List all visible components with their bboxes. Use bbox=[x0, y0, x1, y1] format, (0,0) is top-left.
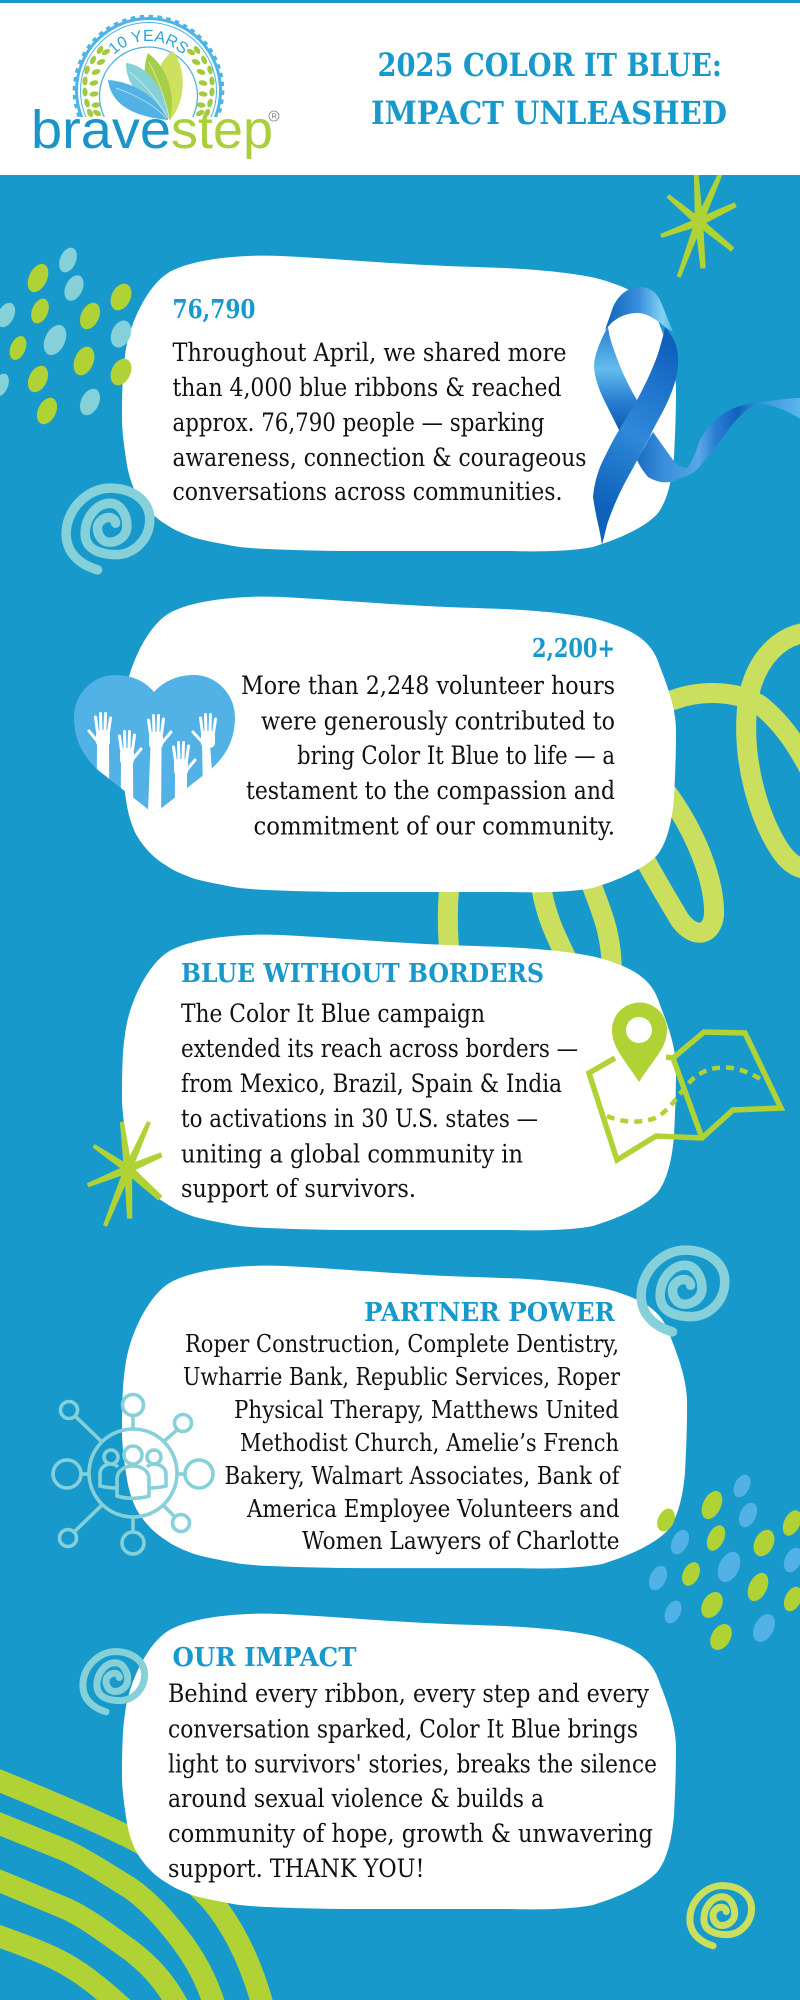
text block: America Employee Volunteers and bbox=[246, 1495, 619, 1523]
text block: commitment of our community. bbox=[254, 812, 615, 840]
registered mark bbox=[269, 111, 279, 121]
decoration: green star top right bbox=[660, 167, 737, 278]
header band bbox=[0, 0, 800, 175]
registered mark: R bbox=[271, 112, 277, 121]
decoration: dots top left bbox=[0, 245, 136, 427]
heading: 2,200+: 2,200+ bbox=[532, 634, 615, 664]
text block: than 4,000 blue ribbons & reached bbox=[172, 373, 562, 402]
decoration: green star left bbox=[87, 1121, 163, 1227]
text block bbox=[181, 999, 578, 1203]
laurel right bbox=[186, 45, 215, 118]
panel: blue without borders bbox=[122, 935, 676, 1230]
icon: blue ribbon bbox=[593, 287, 800, 545]
text block: light to survivors' stories, breaks the silence bbox=[168, 1750, 657, 1778]
title: IMPACT UNLEASHED bbox=[371, 94, 727, 132]
title bbox=[371, 46, 727, 132]
text block: Bakery, Walmart Associates, Bank of bbox=[224, 1462, 621, 1490]
icon: heart with raised hands bbox=[74, 675, 235, 814]
text block: Uwharrie Bank, Republic Services, Roper bbox=[183, 1363, 620, 1391]
text block bbox=[241, 671, 615, 840]
text block: More than 2,248 volunteer hours bbox=[241, 671, 615, 700]
text block bbox=[183, 1330, 621, 1555]
heading: our impact: OUR IMPACT bbox=[172, 1643, 357, 1673]
squiggle decoration bbox=[448, 632, 800, 975]
text block: testament to the compassion and bbox=[246, 776, 615, 805]
panel: partner power bbox=[122, 1266, 687, 1568]
text block: awareness, connection & courageous bbox=[172, 443, 586, 472]
panel: our impact bbox=[122, 1614, 676, 1909]
decoration: teal spiral top right bbox=[641, 1250, 725, 1332]
wordmark: brave bbox=[31, 100, 171, 160]
feathers bbox=[108, 51, 183, 120]
logo: bravestep 10 years: step bbox=[171, 100, 273, 160]
text block bbox=[172, 338, 586, 506]
text block: from Mexico, Brazil, Spain & India bbox=[181, 1069, 562, 1098]
icon: people network bbox=[53, 1394, 213, 1554]
decoration: teal spiral left bbox=[83, 1652, 144, 1712]
decoration: green arcs bbox=[0, 1777, 264, 2000]
badge text: 10 YEARS bbox=[109, 30, 188, 54]
panel: 2,200+ bbox=[122, 597, 676, 892]
panel: 76,790 bbox=[122, 256, 676, 551]
text block: support of survivors. bbox=[181, 1174, 416, 1203]
text block: were generously contributed to bbox=[261, 706, 615, 736]
text block: Physical Therapy, Matthews United bbox=[234, 1396, 619, 1424]
decoration: teal spiral bbox=[66, 488, 150, 570]
text block: approx. 76,790 people — sparking bbox=[172, 408, 544, 437]
text block: bring Color It Blue to life — a bbox=[297, 741, 615, 770]
text block: Methodist Church, Amelie’s French bbox=[240, 1429, 619, 1457]
text block: Women Lawyers of Charlotte bbox=[302, 1527, 620, 1555]
text block: around sexual violence & builds a bbox=[168, 1784, 544, 1813]
text block: conversation sparked, Color It Blue brings bbox=[168, 1714, 638, 1744]
laurel left bbox=[82, 45, 111, 118]
text block: support. THANK YOU! bbox=[168, 1854, 424, 1883]
heading: partner power: PARTNER POWER bbox=[364, 1298, 615, 1328]
text block: extended its reach across borders — bbox=[181, 1034, 578, 1063]
heading: blue without borders: BLUE WITHOUT BORDERS bbox=[181, 959, 544, 989]
text block: to activations in 30 U.S. states — bbox=[181, 1104, 538, 1133]
text block bbox=[168, 1679, 657, 1883]
text block: Roper Construction, Complete Dentistry, bbox=[185, 1330, 619, 1358]
text block: Throughout April, we shared more bbox=[172, 338, 566, 367]
text block: conversations across communities. bbox=[172, 477, 562, 506]
decoration: lime spiral bottom right bbox=[690, 1886, 752, 1946]
text block: uniting a global community in bbox=[181, 1140, 523, 1168]
text block: community of hope, growth & unwavering bbox=[168, 1819, 653, 1848]
logo: bravestep 10 years bbox=[31, 14, 280, 160]
title: 2025 COLOR IT BLUE: bbox=[378, 46, 722, 84]
text block: The Color It Blue campaign bbox=[181, 999, 485, 1028]
icon: map with location pin bbox=[589, 1002, 781, 1160]
text block: Behind every ribbon, every step and every bbox=[168, 1679, 650, 1708]
heading: 76,790: 76,790 bbox=[172, 295, 256, 325]
decoration: dots right bbox=[645, 1472, 800, 1654]
